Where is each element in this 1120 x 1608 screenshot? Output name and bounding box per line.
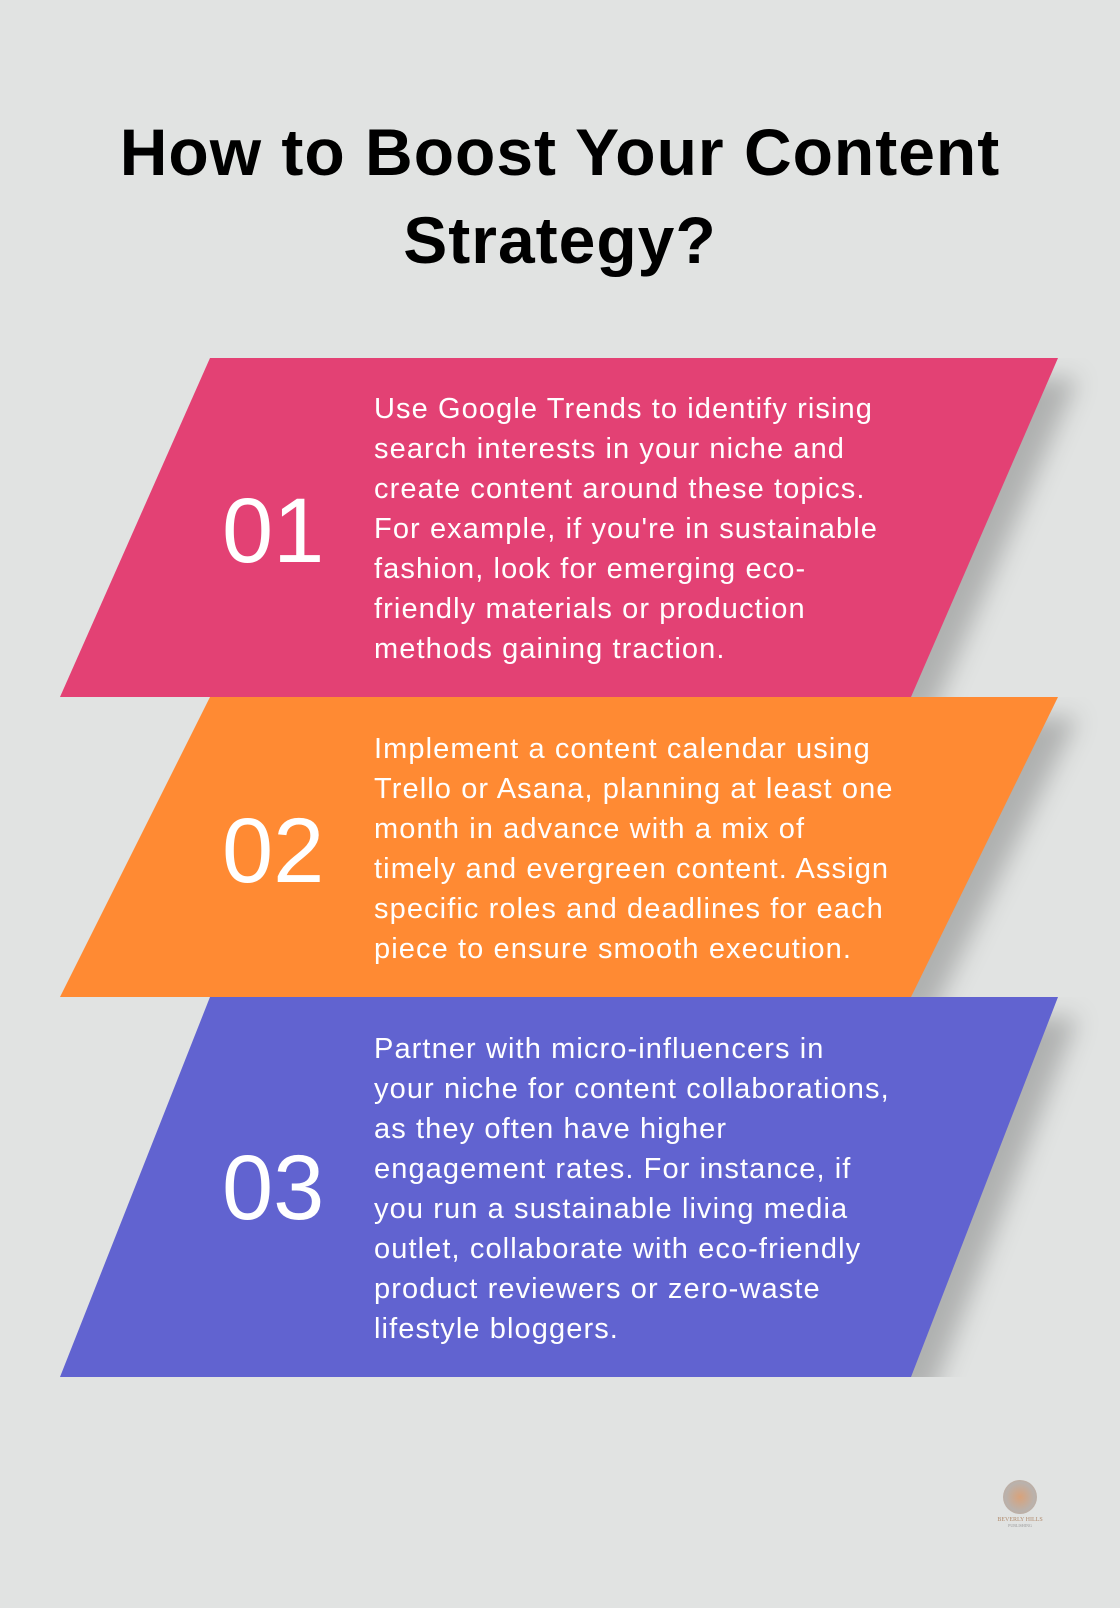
text step 1: create content around these topics. — [374, 473, 866, 505]
logo: BEVERLY HILLS — [997, 1517, 1043, 1523]
logo: PUBLISHING — [1008, 1523, 1032, 1528]
text step 3: as they often have higher — [374, 1113, 727, 1145]
text step 2: Implement a content calendar using — [374, 733, 871, 765]
text step 3: outlet, collaborate with eco-friendly — [374, 1233, 861, 1265]
text step 2: timely and evergreen content. Assign — [374, 853, 889, 885]
text step 3: product reviewers or zero-waste — [374, 1273, 821, 1305]
panel: step 3 — [60, 997, 1082, 1377]
text step 1 — [374, 393, 878, 665]
title: How to Boost Your Content — [120, 115, 1000, 189]
text step 2: Trello or Asana, planning at least one — [374, 773, 894, 805]
text step 1: fashion, look for emerging eco- — [374, 553, 806, 585]
text step 1: friendly materials or production — [374, 593, 806, 625]
text step 2: piece to ensure smooth execution. — [374, 933, 852, 965]
text step 1: Use Google Trends to identify rising — [374, 393, 873, 425]
text step 3: lifestyle bloggers. — [374, 1313, 619, 1345]
number 01: 01 — [222, 480, 324, 582]
number 03: 03 — [222, 1137, 324, 1239]
panel: step 2 — [60, 697, 1081, 997]
panel: step 1 — [60, 358, 1082, 697]
text step 2: specific roles and deadlines for each — [374, 893, 884, 925]
title: Strategy? — [403, 203, 717, 277]
title — [120, 115, 1000, 277]
text step 3: you run a sustainable living media — [374, 1193, 848, 1225]
text step 1: methods gaining traction. — [374, 633, 726, 665]
text step 1: For example, if you're in sustainable — [374, 513, 878, 545]
logo — [997, 1480, 1043, 1528]
text step 3 — [374, 1033, 890, 1345]
text step 1: search interests in your niche and — [374, 433, 845, 465]
text step 3: Partner with micro-influencers in — [374, 1033, 824, 1065]
text step 2 — [374, 733, 894, 965]
text step 2: month in advance with a mix of — [374, 813, 805, 845]
text step 3: your niche for content collaborations, — [374, 1073, 890, 1105]
text step 3: engagement rates. For instance, if — [374, 1153, 851, 1185]
number 02: 02 — [222, 800, 324, 902]
